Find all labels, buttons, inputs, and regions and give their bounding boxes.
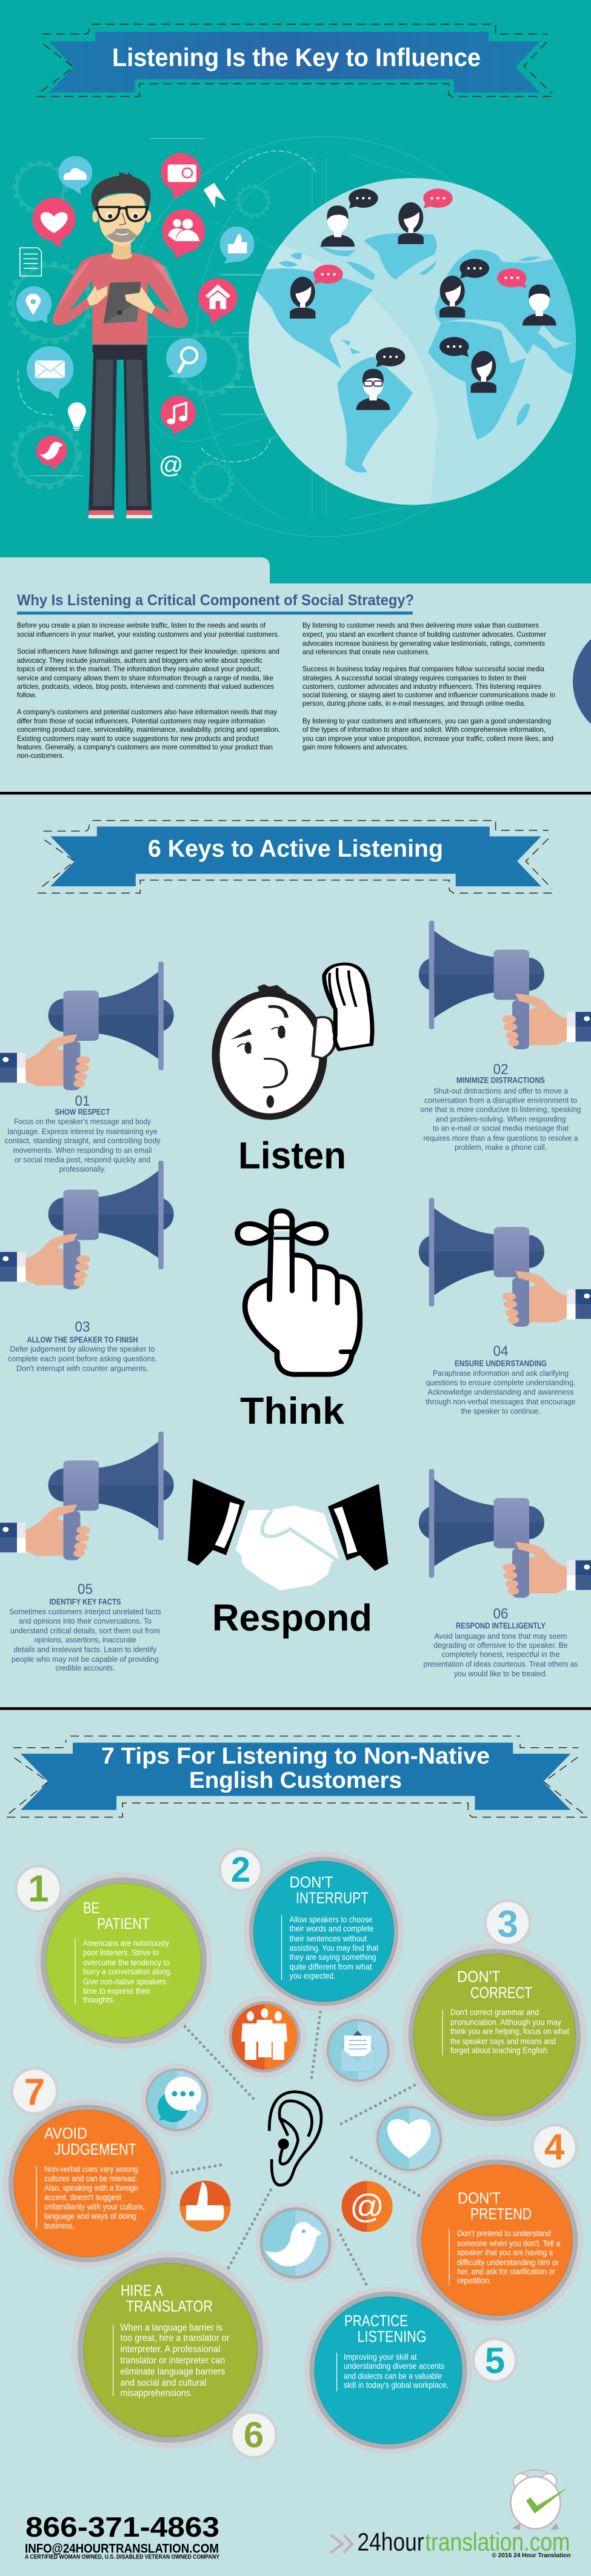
at sign: @: [159, 452, 183, 479]
tip 1: be patient: thoughts.: [83, 1995, 115, 2005]
blue circle edge: [573, 623, 591, 740]
tip 7: avoid judgement: AVOID: [44, 2124, 87, 2142]
title banner: 6 Keys to Active Listening: [38, 820, 556, 893]
badge 3: [484, 1899, 532, 1947]
megaphone 05: [0, 1432, 174, 1560]
key 06 text: [423, 1605, 578, 1678]
key 04 text: Acknowledge understanding and awareness: [428, 1387, 574, 1396]
background wireframe and gears: [10, 136, 527, 537]
tip 5: practice listening: [304, 2286, 472, 2454]
icon: thumbs up: [220, 227, 255, 264]
megaphone 01: [0, 961, 174, 1090]
icon: mail: [27, 346, 73, 399]
key 04 text: the speaker to continue.: [461, 1406, 541, 1415]
key 02 text: 02: [493, 1061, 508, 1078]
label: Think: Think: [240, 1390, 345, 1432]
right column text: expect, you stand an excellent chance of building customer advocates. Customer: [302, 630, 546, 639]
left column text: Social influencers have followings and garner respect for their knowledge, opinions and: [17, 647, 279, 656]
key 02 text: and problem-solving. When responding: [435, 1114, 566, 1123]
right column text: By listening to your customers and influencers, you can gain a good understanding: [302, 717, 551, 725]
label: Listen: Listen: [238, 1135, 346, 1177]
key 01 text: professionally.: [59, 1164, 105, 1173]
tip 7: avoid judgement: language and ways of doing: [44, 2211, 136, 2221]
label: Respond: Respond: [212, 1598, 372, 1639]
footer: logo: © 2016 24 Hour Translation: [492, 2552, 571, 2559]
title banner: 7 Tips For Listening to Non-Native English Customers: 7 Tips For Listening to Non-Native: [101, 1744, 490, 1769]
tip 7: avoid judgement: Also, speaking with a foreign: [44, 2183, 138, 2193]
key 04 text: questions to ensure complete understanding.: [426, 1378, 576, 1387]
tip 6: hire a translator: When a language barrier is: [120, 2323, 222, 2333]
tip 4: don't pretend: repetition.: [457, 2276, 492, 2285]
footer: contact details: A CERTIFIED WOMAN OWNED, U.S. DISABLED VETERAN OWNED COMPANY: [25, 2554, 219, 2561]
tip 2: don't interrupt: they are saying something: [290, 1952, 376, 1962]
key 04 text: [426, 1343, 576, 1415]
right column text: you can improve your value proposition, increase your traffic, collect more likes, and: [302, 734, 553, 743]
tip 3: don't correct: the speaker says and means and: [450, 2036, 556, 2046]
key 05 text: credible accounts.: [56, 1664, 115, 1673]
key 05 text: opinions, assertions, inaccurate: [34, 1635, 136, 1644]
tip 1: be patient: [35, 1872, 212, 2049]
tip 4: don't pretend: Don't pretend to understand: [457, 2228, 551, 2238]
right column text: customers, customer advocates and industry influencers. This listening requires: [302, 682, 541, 691]
tip 2: don't interrupt: INTERRUPT: [296, 1889, 369, 1907]
right column text: person, during phone calls, in e-mail messages, and through online media.: [302, 699, 526, 708]
key 03 text: 03: [75, 1319, 90, 1335]
icon: thumbs up in orange circle: [179, 2181, 230, 2232]
tip 2: don't interrupt: their sentences without: [290, 1934, 367, 1944]
tip 7: avoid judgement: Non-verbal cues vary among: [44, 2164, 138, 2174]
tip 6: hire a translator: eliminate language barriers: [120, 2367, 225, 2377]
badge 6: 6: [244, 2415, 264, 2455]
key 01 text: language. Express interest by maintaining eye: [7, 1127, 158, 1136]
globe: [241, 178, 581, 510]
tip 3: don't correct: forget about teaching English.: [450, 2045, 549, 2055]
right column text: Success in business today requires that companies follow successful social media: [302, 665, 544, 673]
icon: open envelope: [322, 2014, 395, 2086]
tip 4: don't pretend: PRETEND: [470, 2205, 532, 2223]
footer: logo: 24hour: [358, 2528, 424, 2556]
megaphone 03: [0, 1161, 174, 1289]
dashed arrows: [18, 138, 316, 476]
tip 6: hire a translator: too great, hire a translator or: [120, 2333, 229, 2343]
footer: contact details: 866-371-4863: [25, 2511, 219, 2543]
icon: bird: [36, 436, 67, 471]
tip 7: avoid judgement: unfamiliarity with your culture,: [44, 2202, 145, 2211]
tip 7: avoid judgement: accent, doesn't suggest: [44, 2192, 121, 2202]
icon: music: [161, 396, 196, 435]
left column text: differ from those of social influencers. Potential customers may require information: [17, 717, 265, 725]
badge 6: [229, 2411, 278, 2459]
tip 7: avoid judgement: business.: [44, 2220, 75, 2230]
tip 3: don't correct: pronunciation. Although you may: [450, 2017, 561, 2027]
tip 1: be patient: poor listeners. Strive to: [83, 1948, 159, 1957]
key 05 text: and opinions into their conversations. To: [19, 1616, 152, 1625]
left column text: features. Generally, a company's customers are more committed to your product than: [17, 743, 273, 751]
tip 4: don't pretend: speaker that you are having a: [457, 2248, 553, 2257]
tip 6: hire a translator: and social and cultural: [120, 2378, 206, 2388]
badge 7: 7: [24, 2071, 45, 2113]
left column text: service and company allows them to share information through a range of media, like: [17, 674, 273, 682]
right column text: By listening to customer needs and then delivering more value than customers: [302, 621, 539, 629]
left column text: follow.: [17, 691, 36, 699]
left column text: articles, podcasts, videos, blog posts, interviews and comments that valued audiences: [17, 682, 274, 691]
key 06 text: Avoid language and tone that may seem: [434, 1632, 567, 1641]
left column text: topics of interest in the market. The information they require about your product,: [17, 665, 261, 673]
key 02 text: one that is more conducive to listening, speaking: [421, 1105, 581, 1114]
tip 3: don't correct: CORRECT: [470, 1983, 532, 2002]
key 02 text: to an e-mail or social media message that: [433, 1124, 569, 1133]
key 05 text: details and irrelevant facts. Learn to identify: [13, 1645, 157, 1654]
tip 6: hire a translator: misapprehensions.: [120, 2388, 193, 2398]
key 01 text: or social media post, respond quickly and: [15, 1155, 150, 1164]
key 06 text: degrading or offensive to the speaker. Be: [434, 1641, 567, 1650]
key 03 text: ALLOW THE SPEAKER TO FINISH: [27, 1335, 138, 1344]
right column text: social listening, or staying alert to customer and influencer communications made in: [302, 691, 555, 699]
megaphone 06: [419, 1469, 591, 1598]
key 04 text: 04: [493, 1343, 508, 1359]
panel: why listening is critical: [17, 592, 591, 760]
key 06 text: completely honest, respectful in the: [441, 1650, 560, 1659]
badge 1: 1: [28, 1868, 49, 1910]
key 02 text: problem, make a phone call.: [455, 1143, 547, 1152]
key 05 text: Sometimes customers interject unrelated facts: [9, 1607, 161, 1616]
key 05 text: [9, 1581, 161, 1673]
tip 1: be patient: hurry a conversation along.: [83, 1967, 172, 1976]
badge 4: [531, 2123, 578, 2171]
megaphone 02: [419, 921, 591, 1049]
tip 4: don't pretend: difficulty understanding him or: [457, 2257, 559, 2267]
badge 3: 3: [497, 1904, 518, 1945]
icon: people: [162, 209, 205, 259]
left column text: advocacy. They include journalists, authors and bloggers who write about specific: [17, 656, 262, 665]
badge 1: [14, 1865, 62, 1913]
tip 3: don't correct: Don't correct grammar and: [450, 2007, 539, 2017]
tip 6: hire a translator: [72, 2251, 269, 2449]
dotted connector lines: [172, 2012, 421, 2286]
tip 6: hire a translator: TRANSLATOR: [126, 2297, 213, 2315]
heading underline: [17, 612, 413, 614]
left column text: [17, 621, 280, 760]
icon: location pin: [16, 287, 52, 324]
key 02 text: MINIMIZE DISTRACTIONS: [456, 1075, 545, 1085]
tip 6: hire a translator: interpreter. A professional: [120, 2345, 220, 2355]
left column text: social influencers in your market, your existing customers and your potential customers.: [17, 630, 279, 639]
footer: contact details: INFO@24HOURTRANSLATION.COM: [25, 2542, 219, 2556]
right column text: [302, 621, 555, 751]
tip 5: practice listening: skill in today's global workplace.: [344, 2380, 449, 2390]
tip 7: avoid judgement: JUDGEMENT: [55, 2140, 136, 2159]
tip 1: be patient: overcome the tendency to: [83, 1957, 170, 1967]
tip 2: don't interrupt: you expected.: [290, 1971, 336, 1980]
badge 5: 5: [485, 2340, 505, 2381]
tip 2: don't interrupt: assisting. You may find that: [290, 1943, 379, 1953]
icon: document: [20, 248, 41, 276]
right column text: and references that create new customers.: [302, 648, 430, 656]
people on globe with speech bubbles: [290, 188, 556, 410]
badge 5: [472, 2337, 518, 2383]
icon: chat bubbles: [141, 2063, 213, 2136]
tip 2: don't interrupt: [244, 1851, 404, 2011]
icon: camera: [161, 153, 201, 199]
icon: handshake: [188, 1479, 388, 1590]
tip 2: don't interrupt: Allow speakers to choose: [290, 1914, 373, 1924]
tip 5: practice listening: Improving your skill at: [344, 2352, 417, 2362]
title banner: Listening Is the Key to Influence: Listening Is the Key to Influence: [112, 43, 481, 71]
tip 2: don't interrupt: DON'T: [290, 1873, 333, 1891]
key 01 text: 01: [75, 1093, 90, 1109]
icon: home: [198, 278, 238, 324]
tip 4: don't pretend: someone when you don't. Tell a: [457, 2239, 560, 2248]
left column text: concerning product care, serviceability, maintenance, availability, pricing and operation.: [17, 725, 280, 734]
key 05 text: IDENTIFY KEY FACTS: [50, 1597, 121, 1607]
tip 3: don't correct: DON'T: [457, 1968, 501, 1986]
icon: heart: [32, 198, 75, 248]
right column text: strategies. A successful social strategy requires companies to listen to their: [302, 674, 527, 682]
tip 1: be patient: Americans are notoriously: [83, 1938, 169, 1948]
key 04 text: Paraphrase information and ask clarifying: [433, 1369, 569, 1378]
badge 2: 2: [231, 1850, 250, 1890]
tip 6: hire a translator: HIRE A: [121, 2282, 164, 2300]
tip 2: don't interrupt: their words and complete: [290, 1924, 374, 1933]
left column text: Existing customers may want to voice suggestions for new products and product: [17, 734, 259, 743]
title banner: 7 Tips For Listening to Non-Native English Customers: English Customers: [189, 1768, 402, 1793]
icon: ear: [269, 2092, 321, 2185]
hero illustration: man, social icons and globe: [10, 136, 581, 537]
tip 7: avoid judgement: cultures and can be misread.: [44, 2174, 138, 2183]
tip 2: don't interrupt: quite different from what: [290, 1962, 372, 1971]
icon: tag: [204, 183, 226, 208]
key 04 text: through non-verbal messages that encourage: [426, 1397, 576, 1406]
icon: listening face with cupped hand: [212, 964, 372, 1120]
icon: at sign in orange circle: [342, 2181, 393, 2232]
key 02 text: conversation from a disruptive environment to: [424, 1095, 577, 1104]
key 01 text: SHOW RESPECT: [55, 1107, 110, 1117]
footer: logo: [330, 2528, 571, 2559]
title banner: Listening Is the Key to Influence: [37, 24, 554, 96]
title banner: 6 Keys to Active Listening: 6 Keys to Active Listening: [148, 835, 443, 862]
right column text: of the types of information to share and solicit. With comprehensive information,: [302, 725, 546, 734]
icon: cloud: [58, 156, 92, 194]
tip 1: be patient: Give non-native speakers: [83, 1976, 166, 1986]
tip 1: be patient: time to express their: [83, 1986, 150, 1996]
badge 4: 4: [544, 2127, 565, 2168]
key 03 text: complete each point before asking questions.: [8, 1354, 157, 1363]
tip 4: don't pretend: DON'T: [458, 2189, 501, 2207]
megaphone 04: [419, 1198, 591, 1327]
icon: at sign in orange circle: @: [350, 2187, 384, 2225]
key 06 text: presentation of ideas courteous. Treat others as: [423, 1659, 578, 1668]
teal hero background: [0, 0, 591, 583]
man upper body: [52, 172, 189, 353]
key 02 text: requires more than a few questions to resolve a: [423, 1134, 578, 1143]
key 02 text: Shut-out distractions and offer to move a: [433, 1086, 569, 1095]
man legs: [88, 353, 152, 519]
right column text: gain more followers and advocates.: [302, 743, 409, 751]
key 06 text: 06: [493, 1605, 508, 1622]
tip 4: don't pretend: her, and ask for clarification or: [457, 2266, 555, 2276]
key 01 text: Focus on the speaker's message and body: [14, 1117, 151, 1126]
icon: heart in circle: [373, 2103, 445, 2174]
key 03 text: [8, 1319, 157, 1373]
tip 3: don't correct: [402, 1943, 587, 2127]
key 01 text: movements. When responding to an email: [13, 1146, 152, 1155]
key 04 text: ENSURE UNDERSTANDING: [455, 1358, 547, 1368]
left column text: non-customers.: [17, 751, 64, 760]
tip 6: hire a translator: translator or interpreter can: [120, 2355, 225, 2366]
social icon bubbles: [16, 153, 255, 471]
key 01 text: contact, standing straight, and controlling body: [5, 1136, 161, 1145]
badge 7: [10, 2067, 59, 2116]
tip 1: be patient: BE: [83, 1899, 99, 1917]
tip 3: don't correct: think you are helping, focus on what: [450, 2027, 569, 2036]
badge 2: [218, 1847, 263, 1892]
icon: bird in circle: [256, 2203, 336, 2283]
tip 5: practice listening: and dialects can be a valuable: [344, 2371, 442, 2380]
key 03 text: Don't interrupt with counter arguments.: [16, 1364, 149, 1373]
key 01 text: [5, 1093, 161, 1173]
icon: lightbulb: [68, 402, 86, 430]
key 06 text: RESPOND INTELLIGENTLY: [456, 1621, 546, 1630]
heading: Why Is Listening a Critical Component of Social Strategy?: [17, 592, 414, 609]
icon: magnifier: [166, 338, 207, 378]
key 05 text: understand critical details, sort them out from: [10, 1626, 160, 1635]
section divider: [0, 792, 591, 795]
tip 4: don't pretend: [411, 2154, 583, 2326]
key 05 text: 05: [78, 1581, 93, 1598]
right column text: advocates increase business by generating value testimonials, ratings, comments: [302, 639, 545, 648]
title banner: 7 Tips For Listening to Non-Native English Customers: [7, 1736, 587, 1817]
tip 7: avoid judgement: [3, 2099, 172, 2268]
icon: alarm clock with check: [510, 2469, 569, 2530]
footer: contact details: [25, 2511, 219, 2561]
key 06 text: you would like to be treated.: [454, 1669, 547, 1678]
key 02 text: [421, 1061, 581, 1152]
tip 5: practice listening: understanding diverse accents: [344, 2361, 444, 2371]
key 05 text: people who may not be capable of providing: [12, 1655, 159, 1664]
tip 5: practice listening: PRACTICE: [344, 2312, 408, 2330]
key 03 text: Defer judgement by allowing the speaker to: [10, 1344, 155, 1353]
tip 1: be patient: PATIENT: [97, 1914, 150, 1933]
left column text: Before you create a plan to increase website traffic, listen to the needs and wants of: [17, 621, 266, 629]
tip 5: practice listening: LISTENING: [358, 2328, 427, 2346]
icon: finger with tied ribbon: [238, 1211, 360, 1375]
left column text: A company's customers and potential customers also have information needs that may: [17, 708, 277, 716]
section divider: [0, 1707, 591, 1710]
icon: people in orange circle: [223, 1996, 306, 2078]
